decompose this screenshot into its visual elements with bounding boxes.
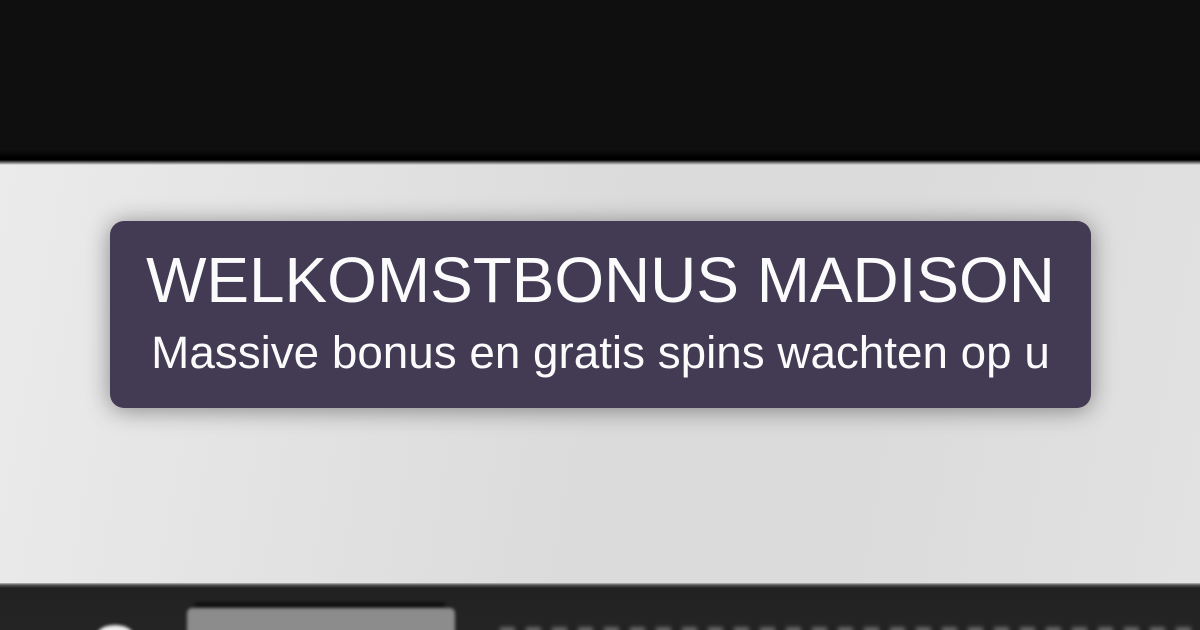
nav grey button <box>187 608 455 630</box>
nav shadow above button <box>195 603 445 608</box>
banner panel <box>110 221 1091 408</box>
bottom dark navigation bar <box>0 583 1200 630</box>
banner subtitle: Massive bonus en gratis spins wachten op u <box>151 327 1050 378</box>
nav logo blob <box>97 625 133 630</box>
banner title: WELKOMSTBONUS MADISON <box>146 244 1055 316</box>
nav blurred menu items <box>500 627 1200 630</box>
blurred page background <box>0 160 1200 586</box>
top dark header band <box>0 0 1200 165</box>
